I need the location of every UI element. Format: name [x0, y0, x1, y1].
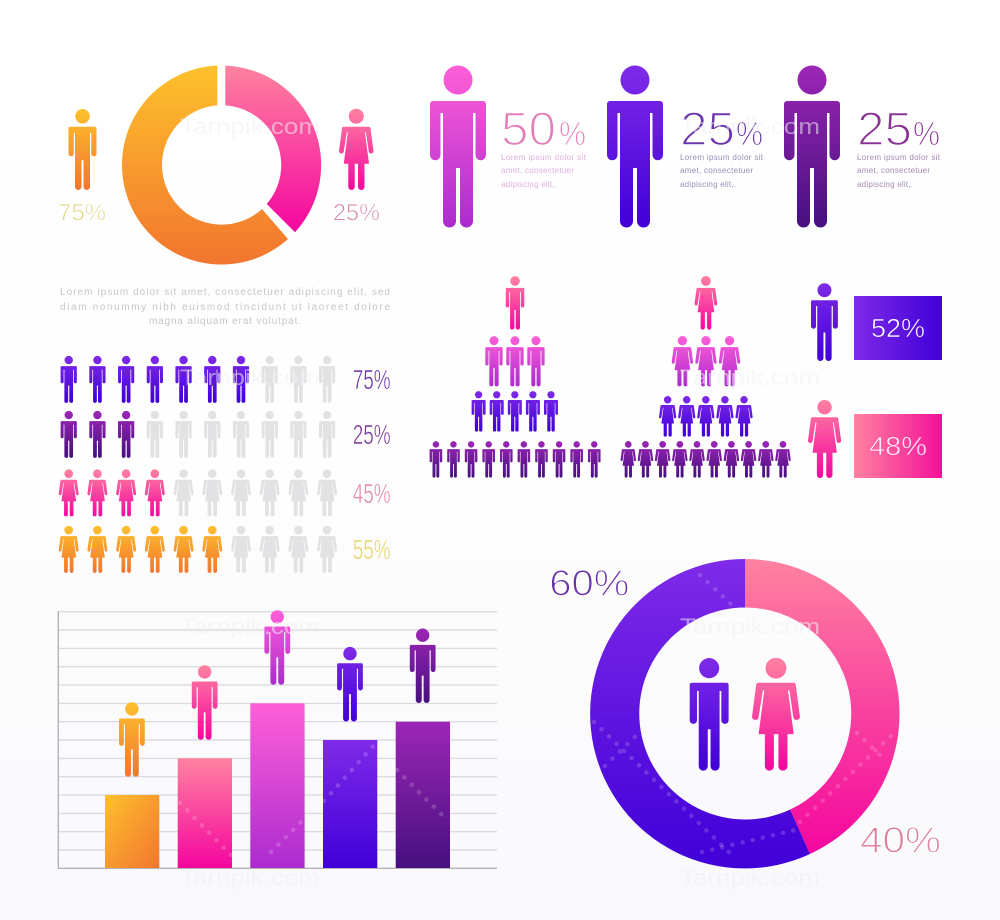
caption: Lorem ipsum dolor sit	[680, 153, 764, 162]
bar 5	[396, 722, 450, 868]
panel: top-left donut with man and woman	[58, 66, 380, 265]
icon row: 7 of 10 violet men	[61, 356, 335, 403]
icon: pink woman	[752, 658, 800, 771]
chart grid	[58, 611, 497, 868]
panel: bar chart with people	[58, 610, 497, 868]
caption	[857, 153, 941, 189]
percent: 50%: 50	[501, 102, 556, 155]
icon: violet man	[690, 658, 729, 771]
pyramid tier 3	[472, 391, 558, 432]
percent: 25%: 25	[857, 102, 912, 155]
caption: amet, consectetuer	[680, 166, 753, 175]
label: 75%: 75%	[58, 200, 106, 226]
watermarks: Tarnpik.com	[680, 614, 820, 639]
icon: large pink man	[430, 66, 486, 228]
pyramid tier 2	[485, 336, 545, 386]
label: 55%: 55%	[353, 534, 391, 565]
bar dot patterns	[180, 744, 448, 855]
pyramid tier 4	[620, 441, 791, 478]
pyramid tier 4	[430, 441, 601, 478]
caption: amet, consectetuer	[857, 166, 930, 175]
icon row: 4 of 10 pink women	[59, 469, 337, 516]
icon row: 6 of 10 orange women	[59, 526, 337, 573]
caption	[680, 153, 764, 189]
donut segment: 60% violet	[590, 559, 810, 868]
pyramid tier 1	[694, 276, 717, 330]
watermarks: Tarnpik.com	[180, 114, 320, 139]
watermarks: Tarnpik.com	[680, 865, 820, 890]
label: 25%: 25%	[333, 200, 380, 226]
percent: 25%	[857, 102, 940, 155]
callout box: 52%	[854, 296, 942, 360]
pyramid tier 1	[506, 276, 524, 330]
percent: 50%	[501, 102, 586, 155]
icon: man on bar 1	[119, 702, 145, 777]
text block: lorem paragraph: Lorem ipsum dolor sit amet, consectetuer adipiscing elit, sed	[60, 287, 390, 298]
percent: 25%	[680, 102, 763, 155]
panel: women pyramid	[620, 276, 791, 478]
donut dot patterns	[594, 575, 895, 855]
icon: violet man	[811, 283, 838, 361]
panel: men pyramid	[430, 276, 601, 478]
label: 40%: 40%	[860, 820, 941, 861]
icon: man on bar 5	[410, 629, 436, 703]
pyramid tier 3	[659, 396, 753, 437]
panel: pink man 50%	[430, 66, 587, 228]
icon: pink woman	[339, 109, 374, 190]
callout box: 48%	[854, 414, 942, 478]
percent: 25%: %	[736, 115, 763, 152]
caption: amet, consectetuer	[501, 166, 574, 175]
panel: percentage icon rows	[59, 356, 391, 573]
watermarks: Tarnpik.com	[180, 614, 320, 639]
icon: man on bar 3	[264, 610, 290, 685]
icon: pink woman	[808, 400, 841, 478]
label: 45%: 45%	[353, 478, 391, 509]
icon: man on bar 4	[337, 647, 363, 721]
label: 60%: 60%	[549, 563, 629, 604]
icon: orange man	[68, 109, 96, 190]
donut segment: 25% pink	[225, 66, 321, 232]
watermarks: Tarnpik.com	[680, 365, 820, 390]
watermarks	[180, 114, 820, 890]
bar 3	[250, 703, 305, 868]
bar 4	[323, 740, 377, 868]
percent: 25%: %	[913, 115, 940, 152]
watermarks: Tarnpik.com	[680, 114, 820, 139]
icon: large plum man	[784, 66, 840, 228]
text block: lorem paragraph	[60, 287, 390, 327]
icon: large violet man	[607, 66, 663, 228]
pyramid tier 2	[672, 336, 740, 386]
caption: adipiscing elit,.	[501, 180, 557, 189]
caption: Lorem ipsum dolor sit	[501, 153, 587, 162]
bar 2	[178, 758, 232, 868]
watermarks: Tarnpik.com	[180, 865, 320, 890]
label: 25%: 25%	[353, 419, 391, 450]
percent: 25%: 25	[680, 102, 735, 155]
panel: bottom-right donut 60 / 40	[549, 559, 941, 868]
icon row: 3 of 10 plum men	[61, 411, 335, 458]
caption: Lorem ipsum dolor sit	[857, 153, 941, 162]
caption: adipiscing elit,.	[680, 180, 736, 189]
label: 75%: 75%	[353, 364, 391, 395]
label: 52%: 52%	[871, 313, 925, 343]
caption	[501, 153, 587, 189]
panel: gender split 52 / 48	[808, 283, 942, 478]
donut segment: 40% pink	[745, 559, 900, 854]
watermarks: Tarnpik.com	[180, 365, 320, 390]
bar 1	[105, 795, 159, 868]
caption: adipiscing elit,.	[857, 180, 913, 189]
icon: man on bar 2	[192, 665, 218, 740]
panel: violet man 25%	[607, 66, 764, 228]
donut segment: 75% orange	[122, 66, 288, 265]
percent: 50%: %	[559, 115, 586, 152]
text block: lorem paragraph: diam nonummy nibh euismod tincidunt ut laoreet dolore	[60, 302, 390, 313]
panel: plum man 25%	[784, 66, 941, 228]
label: 48%: 48%	[869, 431, 927, 461]
text block: lorem paragraph: magna aliquam erat volutpat.	[149, 316, 301, 327]
